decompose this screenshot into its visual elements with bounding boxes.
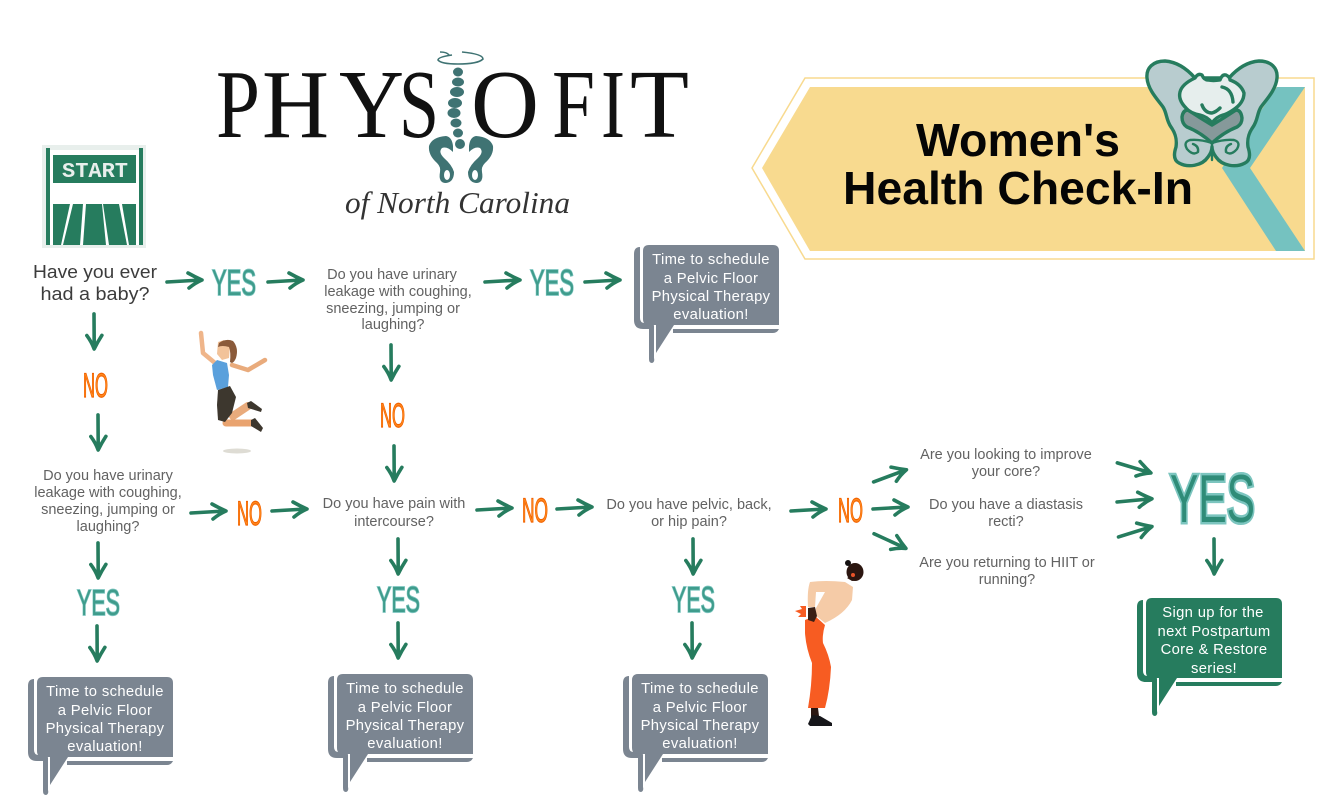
question: had a baby: had a baby? <box>40 284 150 304</box>
logo: PhysioFit of North Carolina: O <box>471 51 539 159</box>
callout: PT evaluation, top: Physical Therapy <box>652 289 771 305</box>
callout: Core and Restore signup <box>1137 598 1282 716</box>
logo: PhysioFit of North Carolina: T <box>630 51 689 159</box>
question: pelvic back hip pain: Do you have pelvic, back, <box>606 497 772 513</box>
logo: PhysioFit of North Carolina: of North Carolina <box>345 185 570 220</box>
question: urinary leakage, top: sneezing, jumping or <box>326 301 460 317</box>
text: NO <box>83 367 108 405</box>
text: NO <box>838 492 863 530</box>
logo: PhysioFit of North Carolina: Y <box>339 51 404 159</box>
callout: PT evaluation, right: Physical Therapy <box>641 718 760 734</box>
icon: start gate: START <box>62 161 128 184</box>
callout: PT evaluation, left: Time to schedule <box>46 684 164 700</box>
question: diastasis recti: Do you have a diastasis <box>929 497 1083 513</box>
question: improve core: Are you looking to improve <box>920 447 1092 463</box>
callout: PT evaluation, left: evaluation! <box>67 739 143 755</box>
callout: PT evaluation, centre: Time to schedule <box>346 681 464 697</box>
text: NO <box>237 495 262 533</box>
icon: start gate <box>42 145 146 248</box>
question: urinary leakage, left: sneezing, jumping or <box>41 502 175 518</box>
banner: Women's Health Check-In <box>752 61 1314 259</box>
callout: PT evaluation, centre: a Pelvic Floor <box>358 700 452 716</box>
text: NO <box>380 397 405 435</box>
callout: PT evaluation, top <box>634 245 779 363</box>
callout: PT evaluation, top: a Pelvic Floor <box>664 271 758 287</box>
label: yes 1: YES <box>212 262 256 303</box>
question: improve core: your core? <box>972 464 1040 480</box>
callout: Core and Restore signup: series! <box>1191 661 1237 677</box>
callout: Core and Restore signup: Core & Restore <box>1161 642 1267 658</box>
callout: PT evaluation, left <box>28 677 173 795</box>
question: returning to HIIT: Are you returning to HIIT or <box>919 555 1095 571</box>
label: yes 5: YES <box>672 579 715 620</box>
callout: PT evaluation, centre: Physical Therapy <box>346 718 465 734</box>
callout: PT evaluation, right: Time to schedule <box>641 681 759 697</box>
callout: PT evaluation, centre <box>328 674 473 792</box>
callout: PT evaluation, right: evaluation! <box>662 736 738 752</box>
label: yes 3: YES <box>77 582 120 623</box>
illustration: jumping woman <box>201 333 265 454</box>
logo: PhysioFit of North Carolina: H <box>262 51 329 159</box>
logo: PhysioFit of North Carolina: I <box>601 51 625 159</box>
callout: PT evaluation, top: evaluation! <box>673 307 749 323</box>
question: had a baby: Have you ever <box>33 262 157 282</box>
callout: Core and Restore signup: Sign up for the <box>1162 605 1264 621</box>
banner title: Health Check-In <box>843 162 1193 214</box>
logo: PhysioFit of North Carolina: F <box>552 51 595 159</box>
icon: pelvis <box>1147 61 1277 166</box>
label: big yes: YES <box>1170 461 1255 537</box>
question: diastasis recti: recti? <box>988 514 1024 530</box>
label: yes 4: YES <box>377 579 420 620</box>
logo: PhysioFit of North Carolina <box>216 51 689 220</box>
logo: PhysioFit of North Carolina: P <box>216 51 260 159</box>
question: urinary leakage, left: leakage with coughing, <box>34 485 182 501</box>
question: urinary leakage, top: leakage with coughing, <box>324 284 472 300</box>
question: urinary leakage, left: laughing? <box>77 519 139 535</box>
callout: Core and Restore signup: next Postpartum <box>1158 624 1270 640</box>
callout: PT evaluation, top: Time to schedule <box>652 252 770 268</box>
banner title: Women's <box>916 114 1120 166</box>
logo: PhysioFit of North Carolina: S <box>399 51 439 159</box>
callout: PT evaluation, left: Physical Therapy <box>46 721 165 737</box>
label: no 4: NO <box>522 492 548 530</box>
question: pain with intercourse: Do you have pain with <box>323 496 465 512</box>
label: yes 2: YES <box>530 262 574 303</box>
question: urinary leakage, top: laughing? <box>362 317 424 333</box>
question: returning to HIIT: running? <box>979 572 1035 588</box>
illustration: woman with back pain <box>795 560 864 726</box>
arrows: flow connectors <box>86 273 1223 661</box>
callout: PT evaluation, right: a Pelvic Floor <box>653 700 747 716</box>
question: pelvic back hip pain: or hip pain? <box>651 514 727 530</box>
callout: PT evaluation, left: a Pelvic Floor <box>58 703 152 719</box>
callout: PT evaluation, right <box>623 674 768 792</box>
question: urinary leakage, left: Do you have urinary <box>43 468 174 484</box>
question: pain with intercourse: intercourse? <box>354 514 434 530</box>
callout: PT evaluation, centre: evaluation! <box>367 736 443 752</box>
question: urinary leakage, top: Do you have urinary <box>327 267 458 283</box>
